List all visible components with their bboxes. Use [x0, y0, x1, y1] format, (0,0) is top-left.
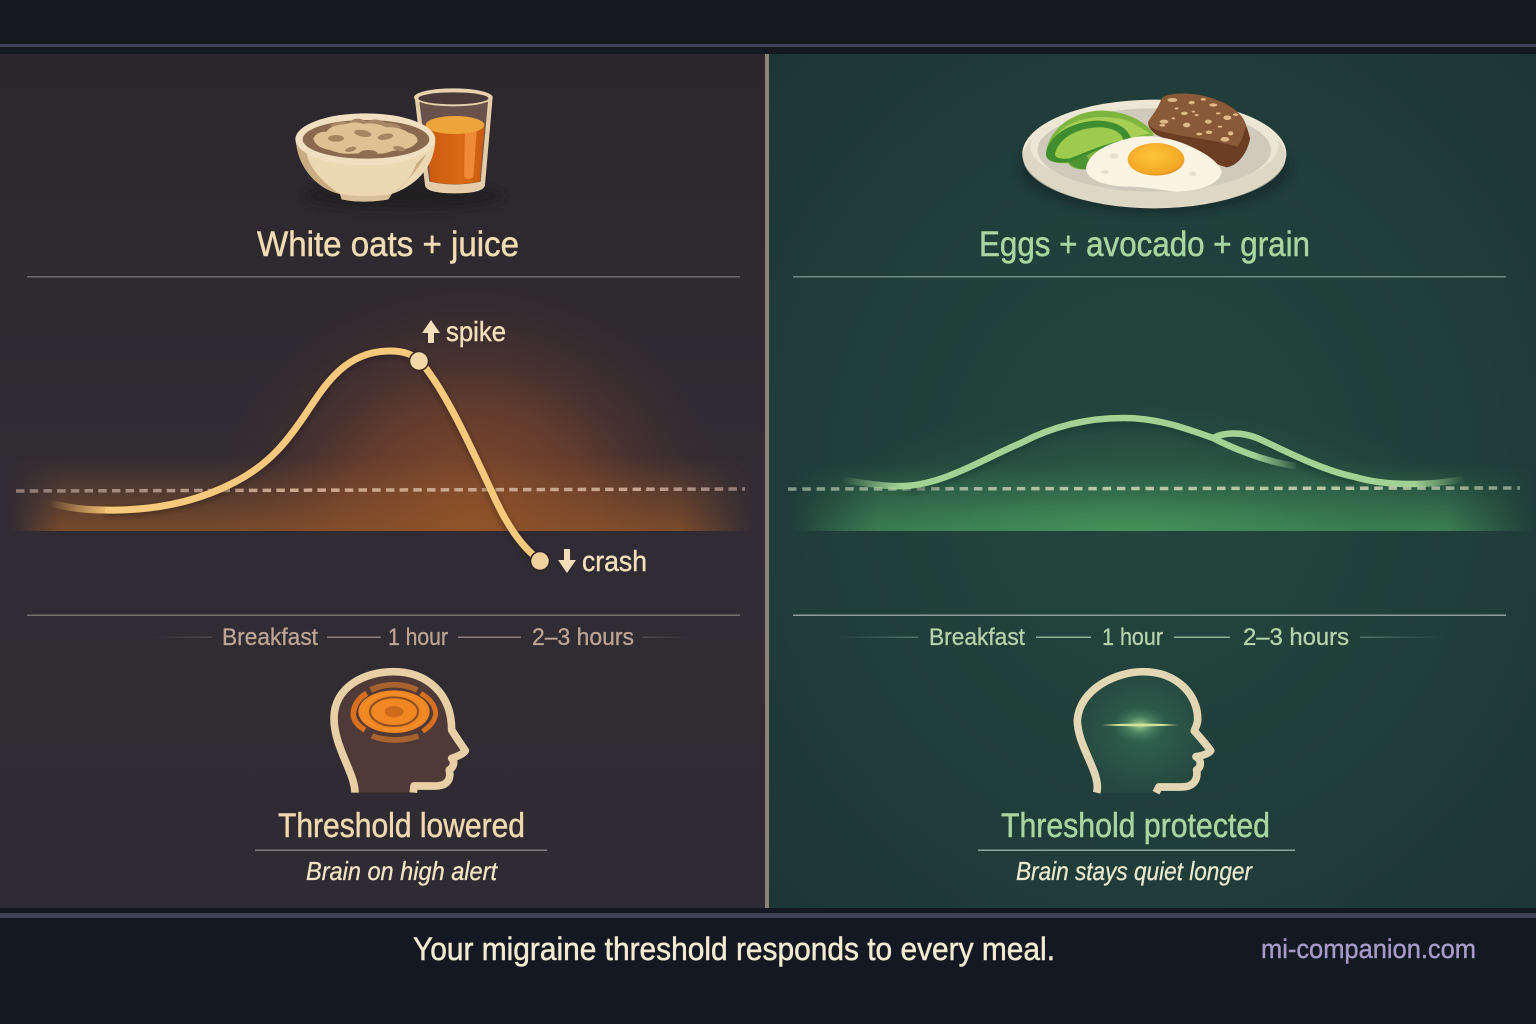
result subtext: brain stays quiet longer: Brain stays quiet longer	[1016, 856, 1253, 886]
glucose curve	[49, 503, 105, 510]
time axis: 2–3 hours	[532, 624, 634, 651]
result heading: threshold lowered: Threshold lowered	[278, 807, 525, 845]
chart: spike and crash	[16, 316, 745, 578]
footer message: Your migraine threshold responds to every meal.	[413, 931, 1055, 967]
time axis: 1 hour	[388, 624, 448, 651]
footer bar	[0, 908, 1536, 1024]
panel: eggs avocado grain	[769, 54, 1536, 908]
threshold dashed line	[16, 489, 745, 491]
footer rule	[0, 913, 1536, 918]
curve shadow	[105, 353, 537, 560]
spike marker	[410, 352, 428, 370]
crash label: crash	[582, 546, 647, 578]
time axis	[150, 624, 693, 651]
calm glow	[1102, 707, 1178, 743]
time axis	[838, 624, 1445, 651]
oat bowl	[295, 113, 435, 202]
time axis: 1 hour	[1102, 624, 1163, 651]
alert rings	[353, 685, 436, 740]
glucose curve tail	[1213, 433, 1463, 484]
center divider	[765, 54, 769, 908]
food icon: eggs avocado toast plate	[1020, 94, 1290, 213]
grain toast	[1148, 94, 1250, 167]
icon: up arrow	[422, 320, 440, 343]
divider: axis	[793, 614, 1506, 616]
icon: down arrow	[558, 549, 576, 573]
curve shadow	[905, 422, 1355, 490]
divider: header	[793, 276, 1506, 278]
chart glow: steady	[800, 439, 1524, 531]
glucose curve main	[842, 418, 1296, 486]
spike label: spike	[446, 316, 506, 347]
chart: gentle curve	[788, 418, 1520, 490]
result subtext: brain on high alert: Brain on high alert	[306, 856, 499, 886]
result heading: threshold protected: Threshold protected	[1001, 807, 1270, 845]
heading: eggs + avocado + grain: Eggs + avocado + grain	[979, 225, 1310, 264]
crash marker	[530, 552, 550, 570]
panel: white oats and juice	[0, 54, 765, 908]
footer website: mi-companion.com	[1261, 934, 1476, 964]
icon: head with calm line	[1077, 672, 1211, 793]
food icon: oats bowl and juice	[295, 88, 504, 209]
time axis: Breakfast	[222, 624, 318, 651]
result divider	[255, 850, 547, 851]
juice glass	[414, 88, 493, 193]
divider: axis	[27, 614, 740, 616]
time axis: Breakfast	[929, 624, 1025, 651]
top rule	[0, 44, 1536, 47]
chart glow: spike	[16, 315, 746, 531]
threshold dashed line	[788, 488, 1520, 489]
heading: white oats + juice: White oats + juice	[257, 225, 519, 264]
time axis: 2–3 hours	[1243, 624, 1349, 651]
result divider	[978, 850, 1295, 851]
icon: head with alert rings	[334, 672, 465, 793]
divider: header	[27, 276, 740, 278]
top bar	[0, 0, 1536, 54]
avocado	[1046, 111, 1154, 169]
fried egg	[1086, 136, 1222, 192]
